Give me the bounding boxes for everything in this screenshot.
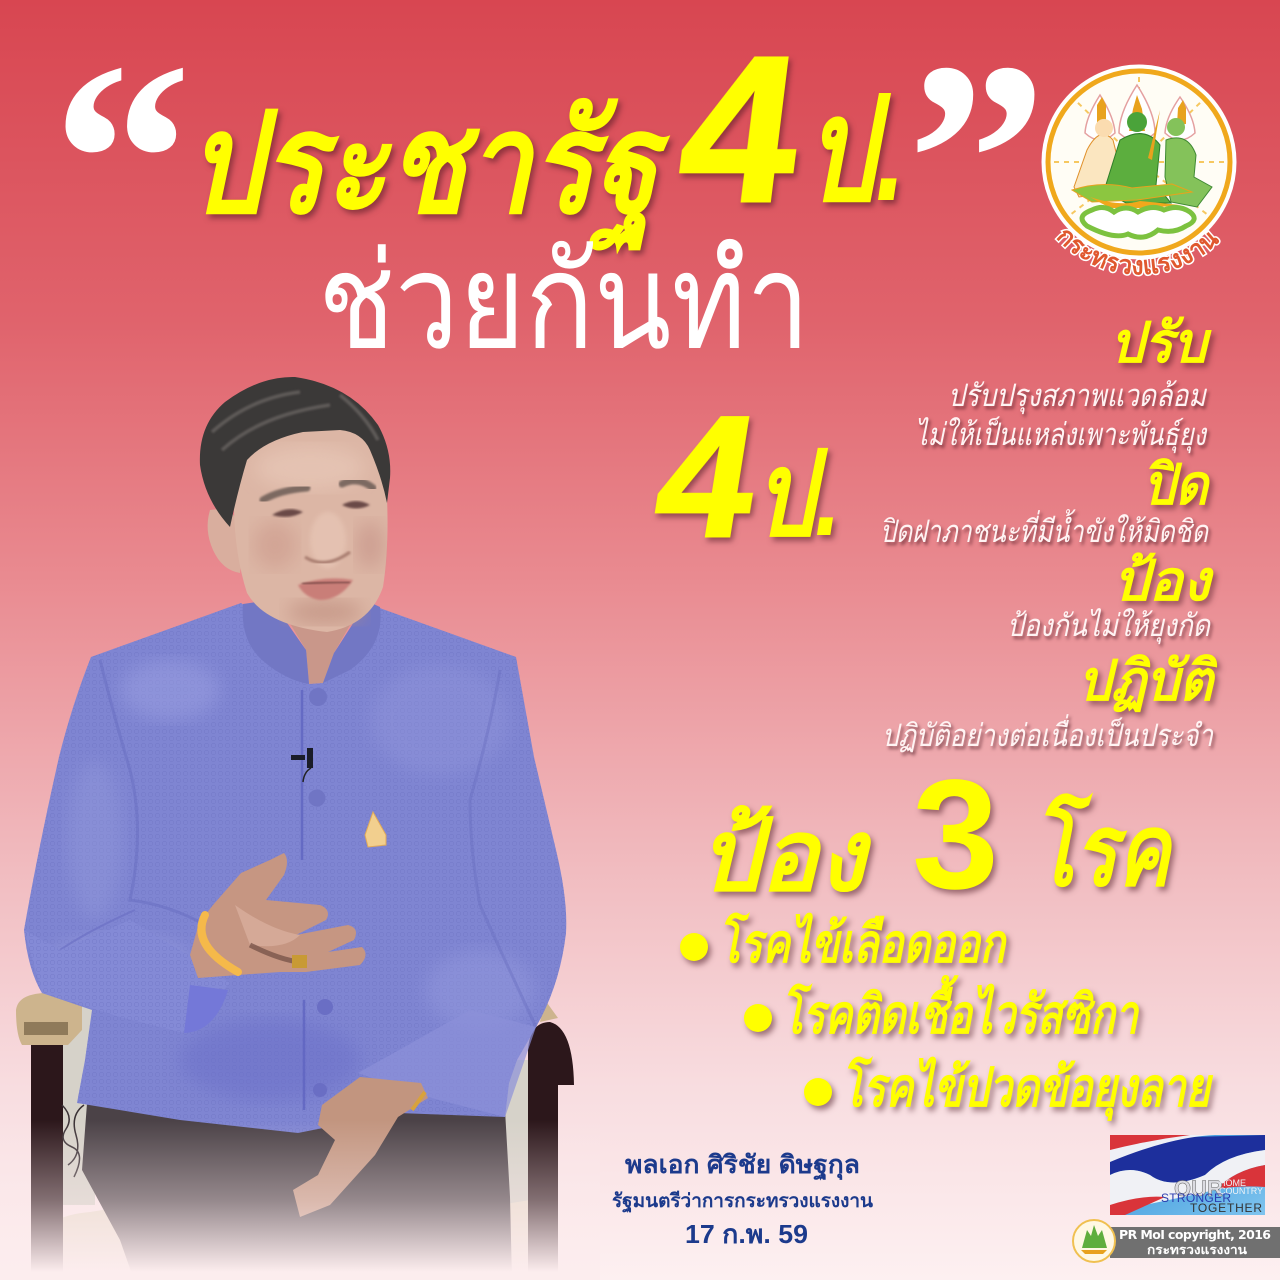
disease 1 [680,911,1008,974]
section heading: 4 ป. [644,380,841,573]
measure 1 [915,311,1212,454]
attribution: รัฐมนตรีว่าการกระทรวงแรงงาน [612,1190,873,1214]
measure 2 [880,453,1211,549]
flag text: TOGETHER [1190,1201,1262,1215]
measure 4: ปฏิบัติ [1078,649,1218,713]
title word: ประชารัฐ [188,85,671,255]
brows, eyes, nose and mouth [263,481,373,600]
measure 3: ป้องกันไม่ให้ยุงกัด [1007,608,1212,645]
list: three diseases [680,911,1213,1121]
fade to background [0,1120,600,1280]
measure 1: ปรับ [1110,311,1212,374]
attribution: พลเอก ศิริชัย ดิษฐกุล [625,1151,860,1181]
heading: prevent 3 diseases: 3 [912,748,999,922]
opening quote mark: “ [52,4,192,315]
measure 3: ป้อง [1113,549,1215,612]
disease 2 [744,974,1140,1045]
measure 2: ปิดฝาภาชนะที่มีน้ำขังให้มิดชิด [880,509,1210,549]
abbreviation: ป. [806,69,906,231]
logo: Ministry of Labour [1042,64,1236,276]
measure 1: ไม่ให้เป็นแหล่งเพาะพันธุ์ยุง [915,416,1208,454]
measure 2: ปิด [1143,453,1211,516]
large number 4: 4 [668,14,813,246]
chair [16,993,574,1280]
measure 4: ปฏิบัติอย่างต่อเนื่องเป็นประจำ [882,714,1214,753]
bracelet [412,1092,425,1110]
head [200,377,390,632]
heading: prevent 3 diseases [699,748,1173,922]
subtitle: ช่วยกันทำ [318,228,810,377]
trousers [82,1090,512,1280]
flag text [1161,1176,1263,1215]
microphone and buttons [291,688,333,1097]
left sleeve cuff over body [24,920,230,1033]
measure 3 [1007,549,1215,645]
section heading: 4 ป.: 4 [644,380,770,573]
neck [270,590,370,684]
measure 1: ปรับปรุงสภาพแวดล้อม [948,378,1207,415]
closing quote mark: ” [907,4,1047,315]
disease 1: โรคไข้เลือดออก [718,911,1008,974]
flag badge [1110,1135,1265,1215]
heading: prevent 3 diseases: ป้อง [699,800,872,912]
ministry name on arc: กระทรวงแรงงาน [1054,228,1221,276]
small logo [1073,1220,1115,1262]
heading: prevent 3 diseases: โรค [1032,792,1173,907]
collar [243,600,381,684]
copyright bar: กระทรวงแรงงาน [1147,1243,1248,1257]
jacket [24,603,566,1133]
measure 4 [882,649,1218,753]
lapel pin [365,812,386,847]
attribution: 17 ก.พ. 59 [685,1219,808,1249]
copyright bar: PR MoI copyright, 2016 [1119,1227,1271,1242]
flag text: OUR [1174,1176,1223,1201]
attribution [612,1151,873,1249]
disease 2: โรคติดเชื้อไวรัสซิกา [781,974,1140,1045]
flag text: COUNTRY [1219,1186,1263,1196]
flag text: HOME [1219,1178,1246,1188]
photo: minister seated in chair [0,377,600,1280]
lower hand [293,1077,428,1217]
list: the four measures [880,311,1218,753]
copyright bar [1073,1220,1280,1262]
title [52,4,1047,315]
hair [200,377,390,527]
section heading: 4 ป.: ป. [755,429,841,561]
raised hand with yellow wristband [190,853,366,978]
flag text: STRONGER [1161,1191,1231,1205]
